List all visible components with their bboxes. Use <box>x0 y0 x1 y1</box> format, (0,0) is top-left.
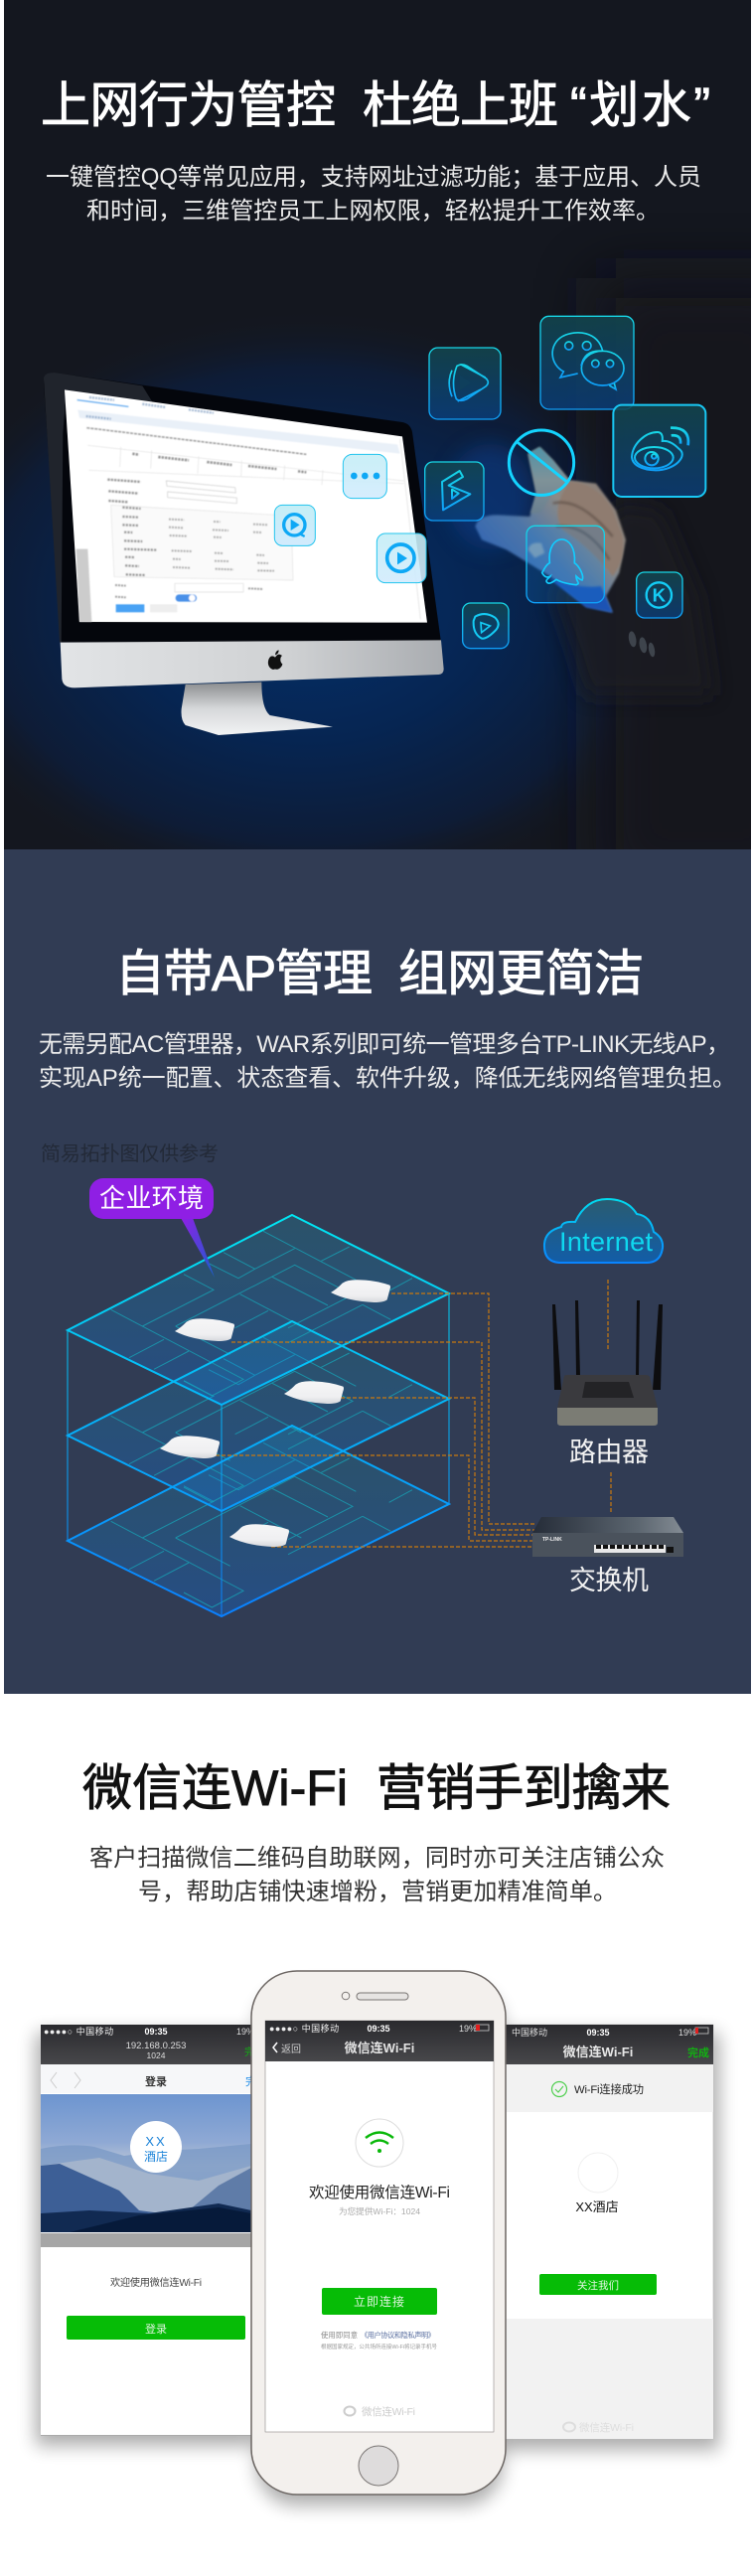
icon: k tile <box>637 572 682 618</box>
text block: behavior description: 和时间，三维管控员工上网权限，轻松提升工作效率。 <box>86 198 660 225</box>
floor 2 middle <box>68 1321 449 1511</box>
wifi name: 为您提供Wi-Fi：1024 <box>339 2205 420 2216</box>
screen <box>65 389 427 623</box>
login header: ●●●●○ 中国移动 <box>44 2026 114 2037</box>
apple logo <box>268 650 282 670</box>
icon: dots tile <box>343 454 386 499</box>
follow button <box>539 2274 657 2295</box>
section background slate <box>4 849 751 1694</box>
caption: topology note: 简易拓扑图仅供参考 <box>41 1142 219 1165</box>
speaker and camera <box>342 1992 408 2000</box>
agreement: 《用户协议和隐私声明》 <box>361 2331 435 2340</box>
panel: app behavior control <box>4 0 753 894</box>
text block: AP description: 实现AP统一配置、状态查看、软件升级，降低无线网络管理负担。 <box>39 1065 736 1092</box>
text block: wechat description: 号，帮助店铺快速增粉，营销更加精准简单。 <box>138 1879 617 1905</box>
icon: video tile <box>429 348 501 419</box>
login button: 登录 <box>145 2322 167 2336</box>
callout: enterprise environment <box>89 1178 215 1278</box>
success strip <box>497 2064 713 2112</box>
success header <box>497 2025 713 2064</box>
login button <box>67 2316 245 2340</box>
floor 3 bottom <box>68 1426 449 1616</box>
text block: wechat description <box>89 1845 665 1905</box>
screen content <box>76 397 420 622</box>
phone header <box>265 2021 494 2061</box>
icon: play tile <box>376 533 426 583</box>
success header: 中国移动 <box>512 2027 547 2038</box>
monitor <box>44 373 444 735</box>
login header: 19% <box>236 2027 254 2037</box>
login header: 09:35 <box>144 2027 168 2037</box>
connect button: 立即连接 <box>354 2294 405 2309</box>
phone body <box>251 1971 506 2495</box>
heading: wechat wifi: 营销手到擒来 <box>376 1760 671 1816</box>
heading: AP management: 自带AP管理 <box>115 946 373 1001</box>
success header: 09:35 <box>586 2028 610 2038</box>
switch <box>532 1517 683 1557</box>
access point 3 <box>284 1381 344 1404</box>
panel: WeChat Wi-Fi <box>36 1760 719 2505</box>
heading: wechat wifi: 微信连Wi-Fi <box>82 1760 348 1816</box>
right side dark falloff <box>564 450 639 763</box>
label: router: 路由器 <box>569 1438 649 1467</box>
agreement <box>321 2331 437 2350</box>
login welcome: 欢迎使用微信连Wi-Fi <box>110 2276 202 2289</box>
center phone <box>251 1971 506 2495</box>
monitor stand <box>181 682 333 735</box>
agreement: 根据国家规定，公共场所连接Wi-Fi将记录手机号 <box>321 2343 437 2350</box>
wifi watermark <box>344 2405 415 2418</box>
welcome text: 欢迎使用微信连Wi-Fi <box>309 2184 450 2201</box>
icon: qq tile <box>527 526 604 603</box>
hotel logo badge <box>130 2121 182 2173</box>
icon: internet cloud: Internet <box>559 1227 653 1257</box>
follow button: 关注我们 <box>577 2279 619 2292</box>
login nav bar: 完 <box>245 2074 256 2088</box>
icon: round play tile <box>463 603 509 649</box>
icon: q player tile <box>274 505 315 545</box>
icon: k tile: K <box>653 585 667 606</box>
blue glow <box>4 248 751 849</box>
switch: TP-LINK <box>542 1537 562 1543</box>
access point 1 <box>331 1280 390 1302</box>
app icons <box>425 316 705 649</box>
login header: 192.168.0.253 <box>126 2041 186 2051</box>
success header: 完成 <box>687 2046 709 2059</box>
hotel avatar <box>578 2153 618 2193</box>
success strip: Wi-Fi连接成功 <box>574 2083 644 2096</box>
section background dark <box>4 0 751 849</box>
hotel logo badge: 酒店 <box>144 2150 168 2164</box>
heading: wechat wifi <box>82 1760 671 1816</box>
phone header: 09:35 <box>367 2024 390 2034</box>
icon: internet cloud <box>544 1199 663 1263</box>
text block: wechat description: 客户扫描微信二维码自助联网，同时亦可关注店铺公众 <box>89 1845 665 1872</box>
dashed links <box>216 1280 611 1547</box>
login header <box>41 2025 254 2064</box>
access point 2 <box>175 1318 234 1341</box>
monitor chin <box>61 640 444 687</box>
floor 1 top <box>68 1215 449 1405</box>
hand and sleeve photo <box>447 444 713 695</box>
heading: behavior control: “划水” <box>570 77 710 133</box>
phone header: 微信连Wi-Fi <box>345 2041 414 2055</box>
wifi watermark: 微信连Wi-Fi <box>362 2405 415 2418</box>
text block: behavior description: 一键管控QQ等常见应用，支持网址过滤功能；基于应用、人员 <box>46 164 701 191</box>
icon: forbidden sign <box>509 430 574 495</box>
success header: 微信连Wi-Fi <box>563 2045 633 2059</box>
connect button <box>322 2288 437 2315</box>
wifi watermark: 微信连Wi-Fi <box>579 2421 634 2434</box>
login photo: mountains <box>41 2094 251 2232</box>
phone header: ●●●●○ 中国移动 <box>269 2023 340 2034</box>
access point 4 <box>160 1436 220 1458</box>
home button <box>359 2446 398 2486</box>
heading: behavior control: 上网行为管控 <box>41 77 336 133</box>
icon: wifi circle <box>356 2119 403 2167</box>
login header: 完 <box>244 2046 254 2058</box>
login nav bar <box>41 2064 256 2093</box>
text block: AP description <box>39 1031 736 1092</box>
login nav bar: 登录 <box>145 2074 167 2088</box>
access point 5 <box>229 1524 289 1547</box>
screen shadows <box>36 1987 719 2505</box>
agreement: 使用即同意 <box>321 2331 358 2340</box>
label: switch: 交换机 <box>569 1566 649 1595</box>
screen <box>265 2021 494 2432</box>
heading: AP management: 组网更简洁 <box>398 946 644 1001</box>
icon: weibo tile <box>613 405 705 497</box>
monitor bezel <box>44 373 441 643</box>
hotel logo badge: XX <box>145 2134 167 2149</box>
cube edges <box>68 1215 449 1616</box>
heading: behavior control <box>41 77 710 133</box>
phone screen: login <box>41 2025 256 2436</box>
phone header: 返回 <box>281 2044 301 2055</box>
panel: AP management <box>4 849 751 1694</box>
heading: AP management <box>115 946 644 1001</box>
text block: behavior description <box>46 164 701 225</box>
login header: 1024 <box>147 2050 166 2060</box>
hotel name: XX酒店 <box>575 2199 619 2214</box>
gray bar <box>41 2233 251 2247</box>
icon: triangle b tile <box>425 462 484 521</box>
heading: behavior control: 杜绝上班 <box>363 77 558 133</box>
gray footer <box>497 2319 713 2439</box>
router <box>552 1300 663 1426</box>
callout: enterprise environment: 企业环境 <box>99 1183 204 1213</box>
success header: 19% <box>678 2028 696 2038</box>
chart: three floor topology <box>68 1178 611 1616</box>
phone header: 19% <box>459 2024 477 2034</box>
text block: AP description: 无需另配AC管理器，WAR系列即可统一管理多台TP-LINK无线AP， <box>39 1031 730 1058</box>
phone screen: success <box>497 2025 713 2439</box>
icon: wechat tile <box>540 316 634 409</box>
